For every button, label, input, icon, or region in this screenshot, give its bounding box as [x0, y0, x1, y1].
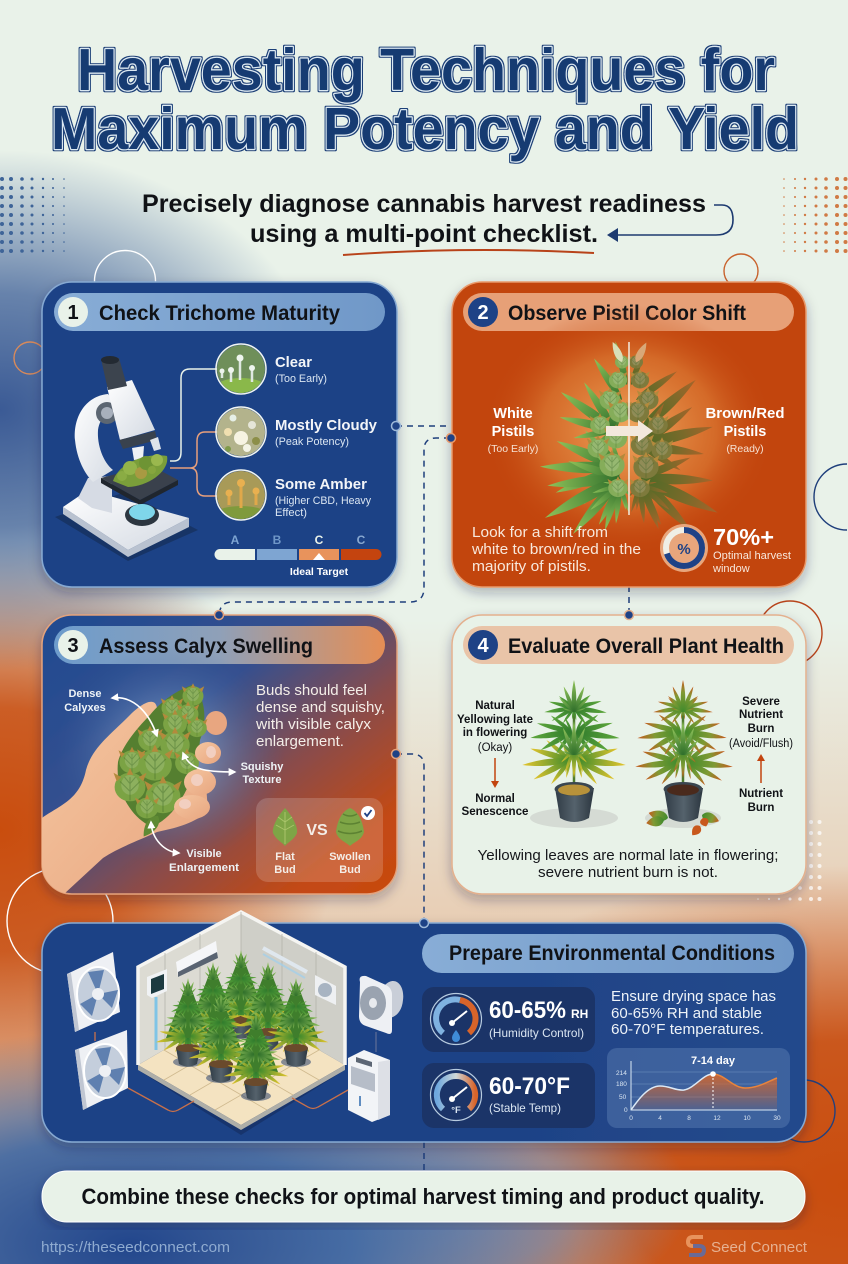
description 5: 60-65% RH and stable — [611, 1006, 762, 1022]
dashed connectors — [219, 426, 629, 1171]
stage labels: Mostly Cloudy — [275, 417, 378, 434]
header 3 — [54, 626, 385, 664]
burn labels: Nutrient — [739, 709, 783, 721]
bud callout labels: Squishy — [241, 761, 284, 773]
burn labels — [729, 696, 793, 814]
illustration: isometric drying room — [138, 912, 345, 1135]
icon: microscope — [55, 356, 198, 561]
header 2 — [463, 293, 794, 331]
subtitle underline — [343, 250, 594, 255]
comparison: flat vs swollen bud: VS — [306, 822, 328, 839]
line chart: 7-14 day: 180 — [616, 1081, 627, 1088]
description 4 — [478, 847, 778, 881]
plant: natural yellowing — [520, 680, 628, 828]
stat: 70 percent: window — [712, 563, 750, 575]
header 5: Prepare Environmental Conditions — [449, 942, 775, 965]
decorative dots left — [0, 177, 65, 253]
description 3: dense and squishy, — [256, 700, 385, 716]
description 4: Yellowing leaves are normal late in flowering; — [478, 847, 778, 864]
pistil labels: (Too Early) — [488, 443, 538, 455]
stat: humidity: 60-65% — [489, 997, 566, 1024]
comparison: flat vs swollen bud: Flat — [275, 851, 295, 863]
callout lines — [170, 369, 217, 496]
description 2 — [471, 525, 641, 575]
subtitle arrow — [607, 205, 733, 242]
panel 4: evaluate overall plant health — [452, 615, 806, 894]
subtitle: using a multi-point checklist. — [250, 220, 598, 248]
icon: box fan 1 — [67, 952, 120, 1032]
line chart: 7-14 day: 8 — [687, 1115, 691, 1122]
stage labels: (Higher CBD, Heavy — [275, 495, 371, 507]
stat: temperature: (Stable Temp) — [489, 1101, 561, 1115]
header 4: Evaluate Overall Plant Health — [508, 635, 784, 658]
stat: temperature — [422, 1063, 595, 1128]
pistil labels: Pistils — [724, 424, 766, 440]
title — [51, 37, 799, 162]
healthy plant labels: Yellowing late — [457, 714, 533, 726]
description 4: severe nutrient burn is not. — [538, 864, 718, 881]
panel 2: observe pistil color shift — [452, 282, 806, 587]
comparison: flat vs swollen bud: Bud — [274, 864, 296, 876]
header 5 — [422, 934, 794, 973]
bud callout labels: Visible — [186, 848, 222, 860]
description 2: white to brown/red in the — [471, 542, 641, 558]
closing banner — [42, 1171, 805, 1222]
burn labels: Burn — [748, 723, 774, 735]
line chart: 7-14 day: 12 — [713, 1115, 721, 1122]
header 1 — [54, 293, 385, 331]
maturity scale: Ideal Target — [290, 566, 349, 578]
description 5: 60-70°F temperatures. — [611, 1022, 764, 1038]
comparison: flat vs swollen bud: Swollen — [329, 851, 371, 863]
line chart: 7-14 day: 4 — [658, 1115, 662, 1122]
panel 3: assess calyx swelling — [42, 615, 397, 894]
subtitle: Precisely diagnose cannabis harvest readiness — [142, 190, 706, 218]
header 4 — [463, 626, 794, 664]
pistil labels — [488, 406, 784, 455]
stage labels: Effect) — [275, 507, 307, 519]
decorative rings — [7, 250, 847, 1142]
burn labels: Severe — [742, 696, 780, 708]
source url: https://theseedconnect.com — [41, 1239, 230, 1256]
bud callout labels: Texture — [243, 774, 281, 786]
header 3: 3 — [67, 635, 79, 657]
stage labels: (Too Early) — [275, 373, 327, 385]
description 5 — [611, 989, 776, 1038]
description 3: Buds should feel — [256, 683, 367, 699]
bud callout arrows — [112, 698, 235, 853]
divider and arrow — [606, 342, 653, 515]
line chart: 7-14 day: 50 — [619, 1094, 627, 1101]
line chart: 7-14 day — [607, 1048, 790, 1128]
healthy plant labels: Normal — [475, 793, 515, 805]
description 3: enlargement. — [256, 734, 344, 750]
comparison: flat vs swollen bud: Bud — [339, 864, 361, 876]
burn labels: Burn — [748, 802, 774, 814]
stat: 70 percent: 70%+ — [713, 524, 774, 550]
glow — [55, 645, 285, 865]
panel 5: prepare environmental conditions — [42, 912, 806, 1142]
line chart: 7-14 day: 10 — [743, 1115, 751, 1122]
donut: 70 percent — [660, 524, 708, 572]
healthy plant labels: Natural — [475, 700, 515, 712]
pistil labels: Brown/Red — [706, 406, 784, 422]
line chart: 7-14 day: 30 — [773, 1115, 781, 1122]
healthy plant labels — [457, 700, 533, 818]
header 2: 2 — [477, 302, 489, 324]
description 2: Look for a shift from — [472, 525, 608, 541]
line chart: 7-14 day: 0 — [629, 1115, 633, 1122]
panel 1: check trichome maturity — [42, 282, 397, 587]
comparison: flat vs swollen bud — [256, 798, 383, 882]
maturity scale: C — [357, 533, 366, 547]
title: Harvesting Techniques for — [77, 37, 775, 103]
decorative dots lower right — [757, 820, 822, 901]
subtitle — [142, 190, 706, 248]
decorative dots right — [783, 177, 848, 253]
plant: nutrient burn — [633, 680, 735, 838]
trichome sample: some amber — [215, 469, 267, 521]
pistil labels: Pistils — [492, 424, 534, 440]
description 3: with visible calyx — [255, 717, 372, 733]
bud callout labels: Calyxes — [64, 702, 106, 714]
line chart: 7-14 day: 7-14 day — [691, 1055, 736, 1067]
logo: seed connect: Seed Connect — [711, 1239, 808, 1256]
closing banner: Combine these checks for optimal harvest timing and product quality. — [82, 1184, 764, 1209]
header 3: Assess Calyx Swelling — [99, 635, 313, 658]
stage labels: (Peak Potency) — [275, 436, 349, 448]
maturity scale — [214, 533, 382, 578]
icon: exhaust fan — [359, 976, 403, 1034]
healthy plant labels: in flowering — [463, 727, 527, 739]
maturity scale: A — [231, 533, 240, 547]
bud callout labels: Dense — [68, 688, 102, 700]
illustration: pistil plant — [525, 341, 735, 555]
maturity scale: B — [273, 533, 282, 547]
pistil labels: (Ready) — [726, 443, 764, 455]
line chart: 7-14 day: 214 — [616, 1070, 627, 1077]
healthy plant labels: Senescence — [462, 806, 528, 818]
stat: humidity: RH — [571, 1007, 588, 1021]
bud callout labels — [64, 688, 284, 874]
trichome sample: clear — [215, 343, 267, 395]
description 5: Ensure drying space has — [611, 989, 776, 1005]
stage labels: Clear — [275, 354, 312, 371]
line chart: 7-14 day: 0 — [624, 1107, 628, 1114]
header 1: 1 — [67, 302, 79, 324]
healthy plant labels: (Okay) — [478, 742, 512, 754]
connector nodes — [214, 422, 634, 928]
icon: box fan 2 — [75, 1030, 128, 1110]
description 3 — [255, 683, 385, 750]
bud callout labels: Enlargement — [169, 862, 239, 874]
title: Maximum Potency and Yield — [51, 96, 799, 162]
trichome sample: mostly cloudy — [216, 407, 266, 457]
stat: temperature: °F — [451, 1105, 461, 1116]
burn labels: (Avoid/Flush) — [729, 738, 793, 750]
stat: 70 percent: Optimal harvest — [713, 550, 791, 562]
header 4: 4 — [477, 635, 489, 657]
header 1: Check Trichome Maturity — [99, 302, 340, 325]
stat: 70 percent — [712, 524, 791, 575]
description 2: majority of pistils. — [472, 559, 591, 575]
glow — [484, 305, 774, 555]
stat: humidity — [422, 987, 595, 1052]
wires — [95, 1032, 376, 1112]
stage labels — [275, 354, 378, 519]
stage labels: Some Amber — [275, 476, 367, 493]
burn labels: Nutrient — [739, 788, 783, 800]
pistil labels: White — [493, 406, 533, 422]
donut: 70 percent: % — [677, 541, 691, 558]
illustration: hand holding bud — [42, 683, 227, 894]
maturity scale: C — [315, 533, 324, 547]
icon: dehumidifier — [348, 1050, 390, 1122]
stat: temperature: 60-70°F — [489, 1073, 570, 1100]
stat: humidity: (Humidity Control) — [489, 1026, 584, 1040]
header 2: Observe Pistil Color Shift — [508, 302, 746, 325]
